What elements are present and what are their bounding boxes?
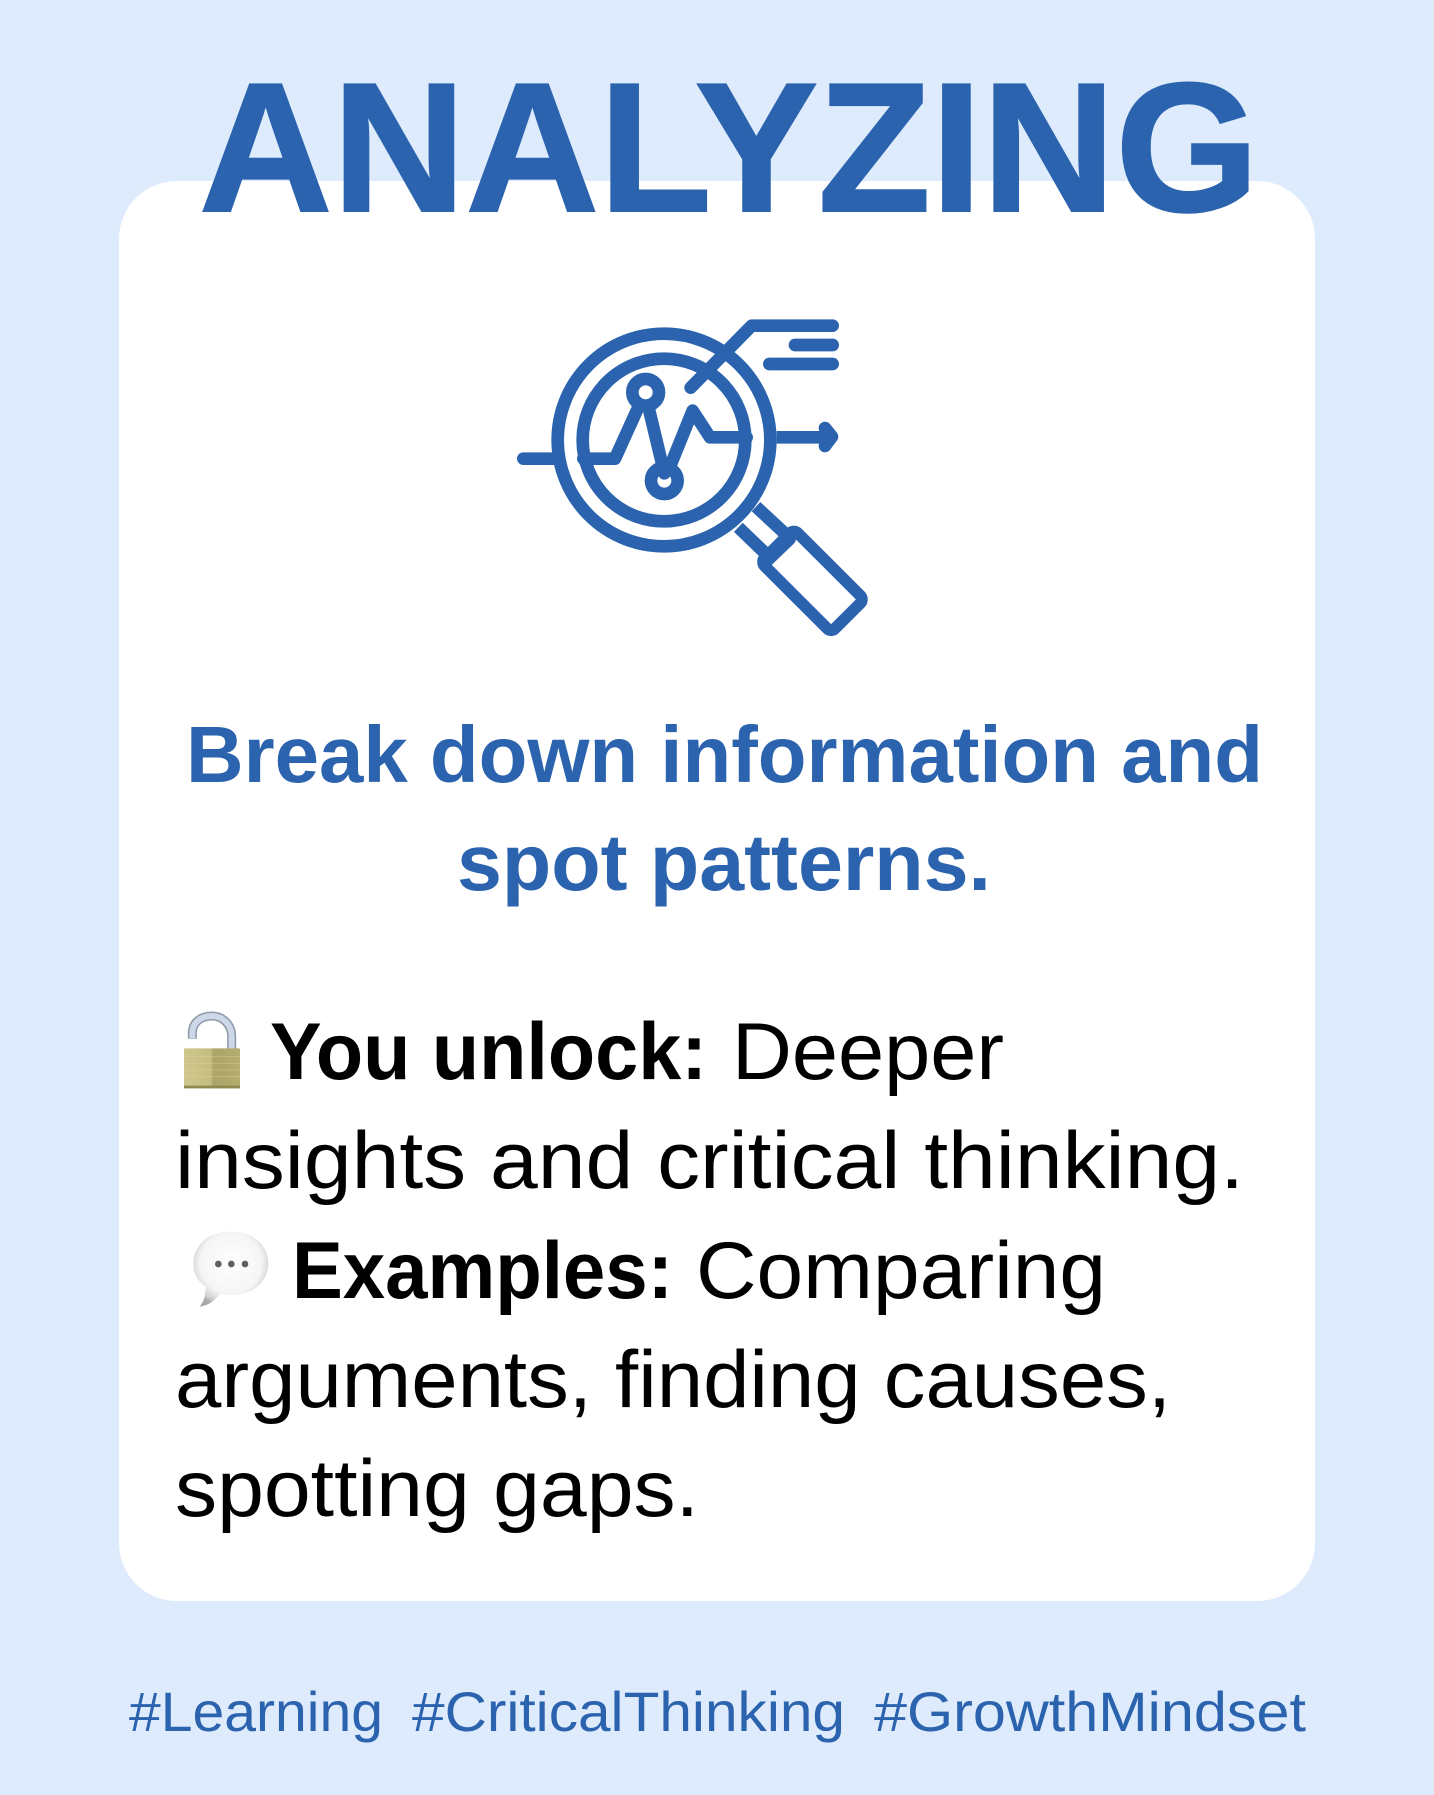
icon: magnifying glass over chart bbox=[523, 326, 864, 632]
text: examples: Examples: bbox=[292, 1226, 673, 1316]
text: you unlock: Deeper bbox=[732, 1007, 1004, 1097]
panel: white card bbox=[119, 181, 1315, 1601]
hashtags: #CriticalThinking bbox=[412, 1680, 845, 1743]
subtitle: Break down information and bbox=[186, 710, 1263, 799]
subtitle: spot patterns. bbox=[457, 818, 991, 907]
hashtags: #GrowthMindset bbox=[874, 1680, 1306, 1743]
subtitle bbox=[186, 710, 1263, 907]
text: examples bbox=[175, 1226, 1171, 1534]
text: you unlock bbox=[175, 1007, 1244, 1206]
text: examples: arguments, finding causes, bbox=[175, 1335, 1171, 1425]
text: examples: Comparing bbox=[696, 1226, 1106, 1316]
icon: speech bubble bbox=[193, 1232, 268, 1307]
icon: open lock bbox=[184, 1016, 240, 1088]
text: you unlock: You unlock: bbox=[270, 1007, 707, 1097]
text: examples: spotting gaps. bbox=[175, 1444, 699, 1534]
hashtags: #Learning bbox=[129, 1680, 383, 1743]
text: you unlock: insights and critical thinking. bbox=[175, 1116, 1244, 1206]
title: ANALYZING bbox=[199, 44, 1259, 250]
hashtags bbox=[129, 1680, 1306, 1743]
